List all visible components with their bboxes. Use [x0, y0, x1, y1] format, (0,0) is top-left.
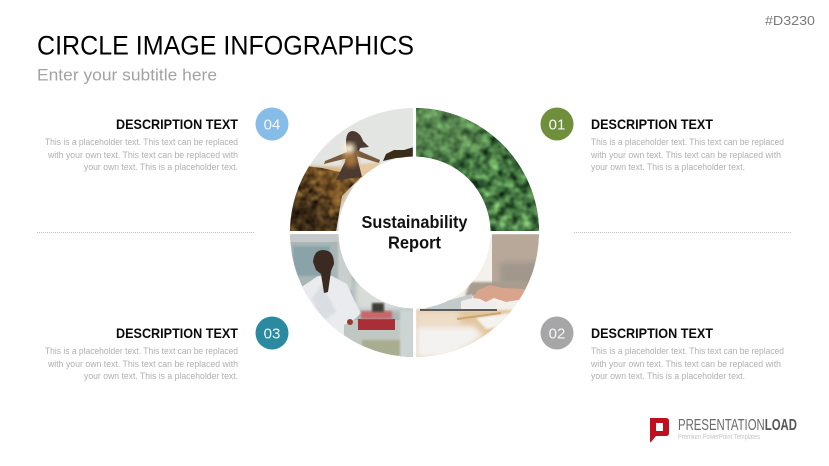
tree line [383, 147, 414, 161]
badge 03: 03 [264, 326, 280, 342]
body text 02: This is a placeholder text. This text can be replaced [591, 346, 784, 356]
logo wordmark: PRESENTATIONLOAD [678, 417, 797, 434]
body text 01: with your own text. This text can be replaced with [590, 150, 781, 160]
center label: Report [388, 232, 441, 252]
desk [416, 308, 512, 357]
badge 02 [540, 316, 574, 350]
heading 02: DESCRIPTION TEXT [591, 325, 713, 341]
pencil [457, 313, 501, 319]
body text 02 [590, 346, 784, 381]
body text 04: with your own text. This text can be replaced with [47, 150, 238, 160]
photo: laptop and hand on desk [416, 234, 540, 358]
badge 01: 01 [549, 116, 565, 134]
icon: logo mark [650, 418, 669, 442]
center label [362, 212, 468, 252]
heading 04: DESCRIPTION TEXT [116, 116, 238, 132]
body text 01: your own text. This is a placeholder text. [591, 162, 745, 172]
body text 02: your own text. This is a placeholder text. [591, 371, 745, 381]
logo tagline: Premium PowerPoint Templates [678, 434, 760, 441]
sun glow [343, 143, 355, 155]
coat [300, 276, 361, 336]
body text 03: This is a placeholder text. This text can be replaced [45, 346, 238, 356]
body text 04 [45, 137, 238, 172]
silhouette [336, 131, 369, 180]
title: CIRCLE IMAGE INFOGRAPHICS [37, 30, 414, 60]
hair [313, 250, 334, 293]
left divider [37, 232, 255, 234]
photo: woman in sunlit field [289, 108, 414, 232]
heading 03: DESCRIPTION TEXT [116, 325, 238, 341]
red tray [358, 319, 395, 330]
center label: Sustainability [362, 212, 468, 232]
heading 01: DESCRIPTION TEXT [591, 116, 713, 132]
body text 04: This is a placeholder text. This text can be replaced [45, 137, 238, 147]
body text 04: your own text. This is a placeholder text. [84, 162, 238, 172]
panel: description 02 [540, 316, 784, 381]
panel: description 03 [45, 316, 288, 381]
hand [473, 285, 525, 302]
body text 01: This is a placeholder text. This text can be replaced [591, 137, 784, 147]
panel: description 04 [45, 108, 288, 172]
body text 02: with your own text. This text can be replaced with [590, 359, 781, 369]
panel: description 01 [540, 108, 784, 172]
badge 03 [256, 316, 288, 350]
photo: scientist in laboratory [289, 234, 415, 358]
body text 01 [590, 137, 784, 172]
body text 03: with your own text. This text can be replaced with [47, 359, 238, 369]
badge 04: 04 [264, 116, 280, 134]
logo: PresentationLoad [650, 417, 797, 442]
bench [344, 320, 406, 357]
reference code: #D3230 [765, 13, 815, 28]
right divider [574, 232, 791, 234]
badge 04 [256, 108, 288, 140]
body text 03: your own text. This is a placeholder text. [84, 371, 238, 381]
badge 02: 02 [549, 326, 565, 342]
body text 03 [45, 346, 238, 381]
subtitle: Enter your subtitle here [37, 66, 217, 84]
photo: forest treetops [416, 108, 540, 232]
badge 01 [540, 108, 574, 140]
laptop [424, 294, 472, 309]
